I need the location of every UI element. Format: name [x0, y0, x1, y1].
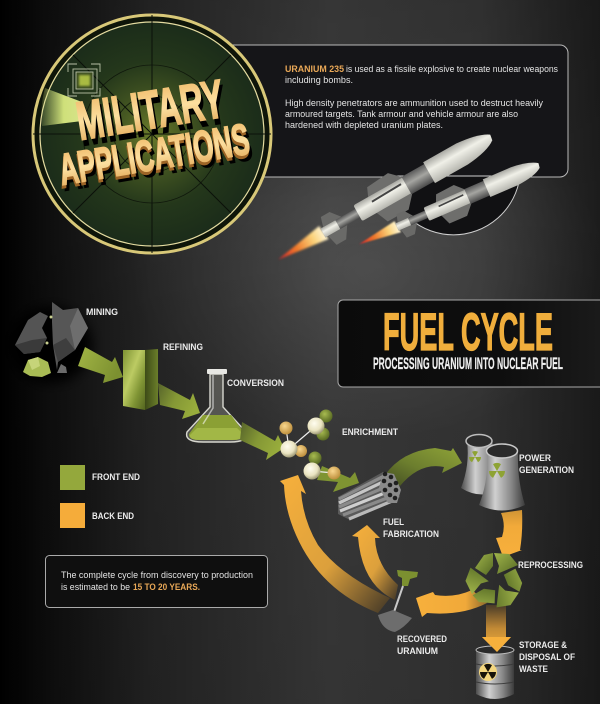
panel text: including bombs. — [285, 75, 353, 85]
label: fuel fabrication: FUEL — [383, 517, 404, 527]
label: fuel fabrication: FABRICATION — [383, 529, 439, 539]
icon: enrichment molecules — [280, 410, 340, 480]
title: military applications: MILITARY — [72, 69, 228, 152]
icon: recycling arrows — [460, 553, 528, 613]
label: storage and disposal of waste: WASTE — [519, 664, 548, 674]
label: storage and disposal of waste: STORAGE & — [519, 640, 567, 650]
label: conversion: CONVERSION — [227, 378, 284, 388]
label: power generation: POWER — [519, 453, 551, 463]
panel text: URANIUM 235 — [285, 64, 344, 74]
arrow: recovered uranium to enrichment — [280, 475, 390, 613]
arrow: refining to conversion — [158, 383, 200, 419]
icon: small missile — [352, 151, 546, 260]
label: recovered uranium: RECOVERED — [397, 634, 447, 644]
arrow: reprocessing to storage — [482, 605, 511, 652]
icon: waste barrel — [476, 646, 514, 699]
legend — [60, 465, 140, 528]
label: power generation: GENERATION — [519, 465, 574, 475]
title: military applications: MILITARY — [75, 75, 230, 158]
panel: fuel cycle heading — [338, 300, 600, 387]
panel text: armoured targets. Tank armour and vehicle armour are also — [285, 109, 518, 119]
legend: front end: FRONT END — [92, 472, 140, 482]
title: military applications: APPLICATIONS — [55, 118, 253, 198]
callout: cycle duration: is estimated to be — [61, 582, 130, 592]
arrow: fuel fabrication to power generation — [385, 448, 462, 486]
icon: radar target — [68, 64, 100, 96]
icon: conversion flask — [187, 369, 246, 442]
icon: mining rocks — [8, 302, 92, 383]
title: military applications: APPLICATIONS — [58, 121, 255, 201]
callout: cycle duration: The complete cycle from discovery to production — [61, 570, 253, 580]
label: recovered uranium — [397, 634, 447, 656]
icon: refining block — [108, 349, 158, 410]
icon: uranium ore — [23, 357, 51, 377]
label: power generation — [519, 453, 574, 475]
panel text — [285, 64, 558, 130]
label: refining: REFINING — [163, 342, 203, 352]
arrow: mining to refining — [78, 347, 123, 383]
title: military applications: APPLICATIONS — [56, 115, 253, 195]
legend: back end: BACK END — [92, 511, 134, 521]
callout: cycle duration: 15 TO 20 YEARS. — [133, 582, 200, 592]
arrow: recovered uranium to fuel fabrication — [352, 525, 398, 600]
panel: uranium 235 description — [225, 45, 568, 177]
panel: semicircle behind missiles — [387, 176, 520, 235]
arrow: enrichment to fuel fabrication — [317, 466, 359, 492]
title: military applications — [55, 69, 255, 201]
label: storage and disposal of waste — [519, 640, 575, 674]
icon: cooling towers — [461, 434, 525, 510]
panel text: High density penetrators are ammunition used to destruct heavily — [285, 98, 543, 108]
label: reprocessing: REPROCESSING — [518, 560, 583, 570]
panel text: hardened with depleted uranium plates. — [285, 120, 443, 130]
icon: large missile — [268, 120, 503, 278]
arrowhead: storage tip over barrel — [482, 637, 511, 652]
panel text: is used as a fissile explosive to create nuclear weapons — [346, 64, 558, 74]
label: storage and disposal of waste: DISPOSAL OF — [519, 652, 575, 662]
label: fuel fabrication — [383, 517, 439, 539]
callout: cycle duration — [46, 556, 268, 608]
label: recovered uranium: URANIUM — [397, 646, 438, 656]
arrow: power generation to reprocessing — [496, 510, 522, 557]
radar badge — [33, 15, 271, 253]
icon: shovel — [378, 570, 418, 632]
label: mining: MINING — [86, 307, 118, 317]
icon: fuel rods — [338, 472, 401, 520]
label: enrichment: ENRICHMENT — [342, 427, 398, 437]
arrow: conversion to enrichment — [240, 422, 284, 460]
icon: radar beam — [41, 88, 82, 126]
arrow: reprocessing to recovered uranium — [416, 590, 487, 617]
